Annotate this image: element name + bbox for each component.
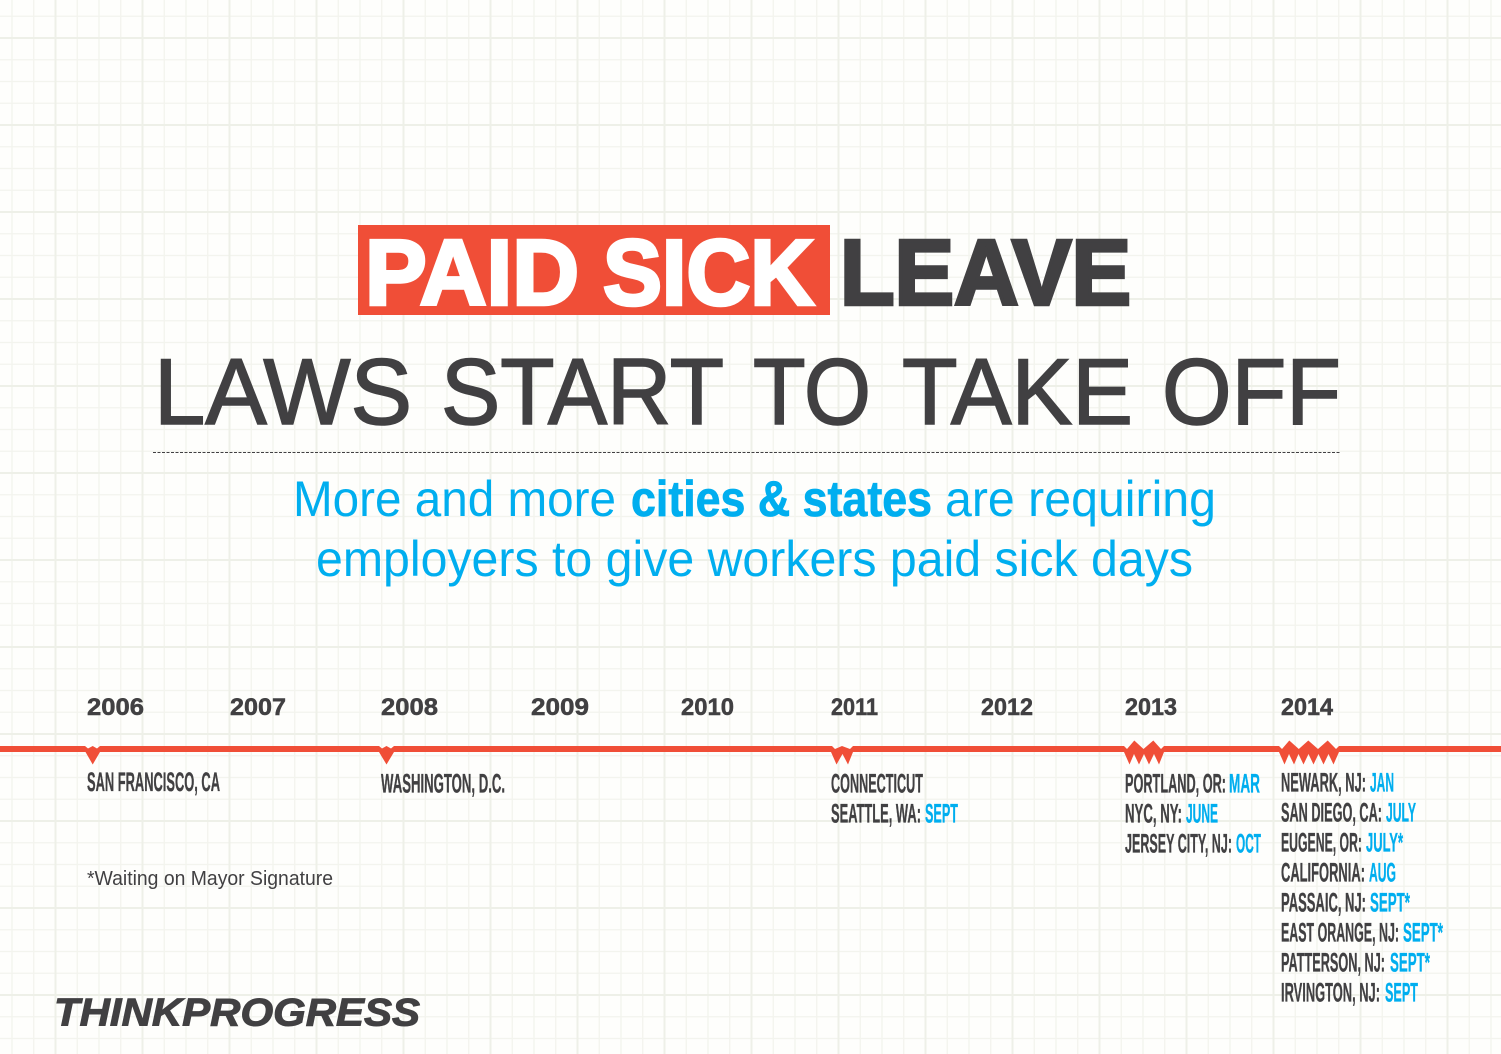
subtitle: More and more (293, 471, 616, 527)
title word: leave: LEAVE (840, 220, 1131, 324)
2014 entries: JULY* (1366, 828, 1403, 858)
2011 entries (831, 768, 958, 828)
2014 entries: EUGENE, OR: (1281, 828, 1362, 858)
year labels: 2014 (1281, 694, 1334, 721)
year labels: 2011 (831, 694, 878, 721)
title line two: TO (753, 339, 871, 444)
subtitle: cities & states (631, 471, 932, 527)
2014 entries: SEPT* (1370, 888, 1410, 918)
2013 entries (1125, 768, 1261, 858)
text: SAN FRANCISCO, CA (87, 767, 220, 797)
text: WASHINGTON, D.C. (381, 768, 505, 798)
2013 entries: MAR (1229, 768, 1260, 798)
title line two: LAWS (154, 339, 412, 444)
2014 entries: SAN DIEGO, CA: (1281, 798, 1382, 828)
2013 entries: PORTLAND, OR: (1125, 768, 1226, 798)
2014 entries: IRVINGTON, NJ: (1281, 978, 1380, 1008)
2014 entries: CALIFORNIA: (1281, 858, 1365, 888)
2014 entries: PATTERSON, NJ: (1281, 948, 1385, 978)
text: SEPT (925, 798, 958, 828)
2014 entries: PASSAIC, NJ: (1281, 888, 1366, 918)
year labels: 2008 (381, 694, 438, 721)
2014 entries: AUG (1369, 858, 1396, 888)
title line one: paid sick highlight: SICK (603, 220, 814, 324)
year labels: 2012 (981, 694, 1033, 721)
year labels: 2009 (531, 694, 589, 721)
title line one: paid sick highlight: PAID (365, 220, 579, 324)
text: OCT (1236, 828, 1261, 858)
subtitle (293, 471, 1216, 587)
title line two: START (441, 339, 724, 444)
year labels: 2006 (87, 694, 144, 721)
text: SEPT* (1403, 918, 1443, 948)
2013 entries: JERSEY CITY, NJ: (1125, 828, 1232, 858)
2014 entries: SEPT (1385, 978, 1418, 1008)
2014 entries: JAN (1370, 768, 1394, 798)
timeline with markers (0, 740, 1501, 764)
title (154, 220, 1341, 444)
2014 entries: NEWARK, NJ: (1281, 768, 1366, 798)
2011 entries: CONNECTICUT (831, 768, 923, 798)
2013 entries: NYC, NY: (1125, 798, 1182, 828)
2011 entries: SEATTLE, WA: (831, 798, 921, 828)
2014 entries (1281, 768, 1443, 1008)
year labels: 2013 (1125, 694, 1177, 721)
title line one: paid sick highlight (358, 220, 830, 324)
footnote: *Waiting on Mayor Signature (87, 868, 333, 890)
subtitle: are requiring (945, 471, 1216, 527)
year labels (87, 694, 1334, 721)
2013 entries: JUNE (1186, 798, 1218, 828)
title line two (154, 339, 1341, 444)
2014 entries: JULY (1386, 798, 1416, 828)
title line two: TAKE (902, 339, 1133, 444)
year labels: 2010 (681, 694, 734, 721)
year labels: 2007 (230, 694, 286, 721)
title line two: OFF (1162, 339, 1341, 444)
logo: thinkprogress: THINKPROGRESS (54, 992, 420, 1034)
2014 entries: SEPT* (1390, 948, 1430, 978)
subtitle: employers to give workers paid sick days (316, 531, 1193, 587)
